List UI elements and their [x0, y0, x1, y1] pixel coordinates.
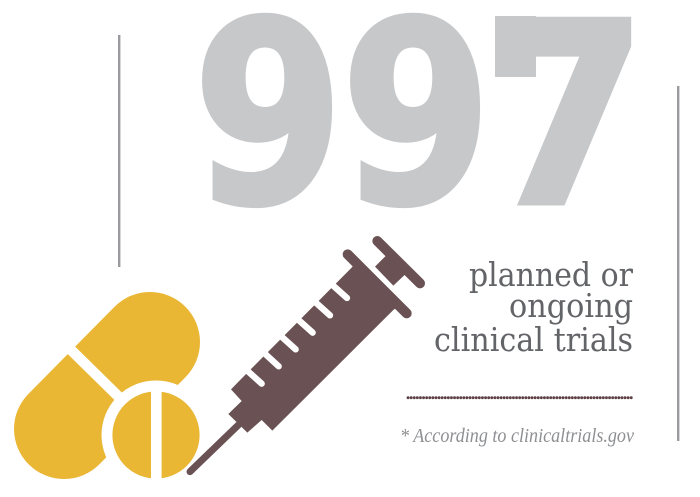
- caption: planned or ongoing clinical trials: clinical trials: [434, 320, 633, 359]
- left vertical rule: [118, 35, 120, 267]
- big number 997: [193, 0, 647, 263]
- caption: planned or ongoing clinical trials: ongoing: [509, 286, 633, 325]
- caption: planned or ongoing clinical trials: planned or: [469, 255, 633, 294]
- icon: syringe: [190, 241, 420, 472]
- icon: capsule and tablet: [64, 342, 210, 490]
- dotted divider: [408, 396, 633, 399]
- caption: planned or ongoing clinical trials: [434, 255, 633, 359]
- footnote: * According to clinicaltrials.gov: [400, 425, 634, 447]
- right vertical rule: [677, 86, 679, 441]
